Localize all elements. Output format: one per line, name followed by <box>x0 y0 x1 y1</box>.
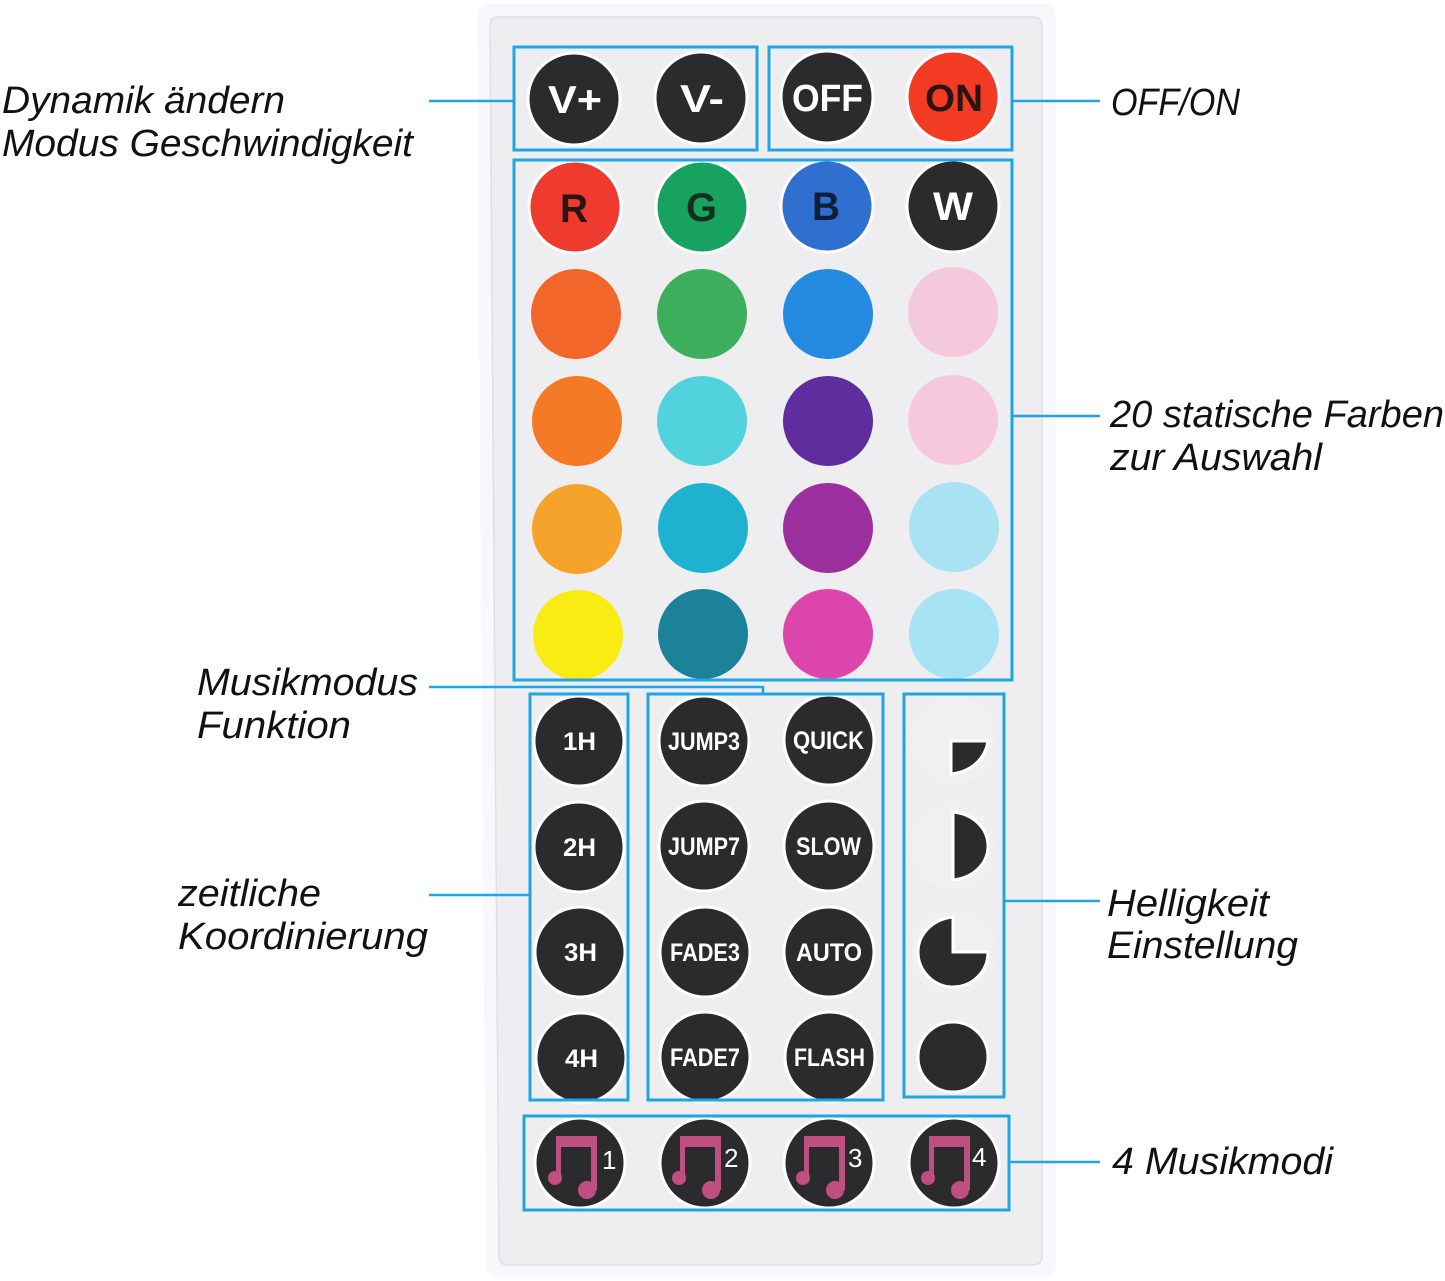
button: music 3 <box>784 1118 874 1208</box>
connector: music modes <box>1009 1161 1100 1163</box>
button: FADE3 <box>660 907 750 997</box>
label: timer: Koordinierung <box>178 916 428 958</box>
button: G <box>656 161 748 253</box>
button: music 1: 1 <box>602 1145 616 1175</box>
button: QUICK <box>784 695 874 785</box>
button: music 4 <box>909 1118 999 1208</box>
button: AUTO <box>784 907 874 997</box>
button: OFF <box>781 51 873 143</box>
brightness buttons <box>909 696 997 1092</box>
button: FADE3: FADE3 <box>670 939 740 967</box>
button: ON <box>907 51 999 143</box>
button: 3H <box>535 907 625 997</box>
button: JUMP3: JUMP3 <box>668 728 740 756</box>
button: 2H: 2H <box>563 834 596 862</box>
button: music 4: 4 <box>972 1142 986 1172</box>
connector: speed <box>429 100 514 102</box>
label: colours <box>1109 394 1444 479</box>
button: music 2: 2 <box>724 1143 738 1173</box>
remote control body <box>477 4 1056 1277</box>
button: V- <box>655 52 747 144</box>
button: 2H <box>534 802 624 892</box>
connector: music function <box>429 687 763 694</box>
button: FLASH: FLASH <box>794 1044 865 1072</box>
button: B: B <box>812 185 840 229</box>
label: speed <box>2 80 414 165</box>
label: music modes: 4 Musikmodi <box>1112 1141 1335 1183</box>
button: 3H: 3H <box>564 939 597 967</box>
button: JUMP7 <box>659 801 749 891</box>
label: timer: zeitliche <box>177 873 321 915</box>
button: FADE7: FADE7 <box>670 1044 740 1072</box>
highlight box: off on <box>769 47 1012 150</box>
button: music 3: 3 <box>848 1143 862 1173</box>
button: 4H <box>536 1013 626 1103</box>
button: FADE7 <box>660 1012 750 1102</box>
button: W <box>907 160 999 252</box>
highlight box: music function <box>648 694 883 1100</box>
label: brightness: Einstellung <box>1107 925 1298 967</box>
label: brightness: Helligkeit <box>1107 883 1271 925</box>
button: 1H: 1H <box>563 728 596 756</box>
button: R <box>529 161 621 253</box>
colour buttons grid <box>531 267 999 680</box>
label: music function <box>197 662 418 747</box>
button: JUMP3 <box>659 696 749 786</box>
button: W: W <box>933 185 973 229</box>
highlight box: speed <box>514 47 757 150</box>
button: music 2 <box>660 1118 750 1208</box>
highlight box: music modes <box>524 1116 1009 1210</box>
label: speed: Dynamik ändern <box>2 80 285 122</box>
highlight box: brightness <box>904 694 1004 1097</box>
button: V+: V+ <box>548 79 602 122</box>
label: colours: zur Auswahl <box>1109 437 1324 479</box>
button: SLOW: SLOW <box>796 833 861 861</box>
button: JUMP7: JUMP7 <box>668 833 740 861</box>
connector: colours <box>1012 415 1100 417</box>
button: OFF: OFF <box>792 78 863 120</box>
label: music function: Funktion <box>197 705 351 747</box>
connector: timer <box>429 894 530 896</box>
button: 4H: 4H <box>565 1045 598 1073</box>
button: B <box>781 160 873 252</box>
label: timer <box>177 873 428 958</box>
connector: brightness <box>1004 900 1100 902</box>
button: R: R <box>560 187 588 231</box>
highlight box: colours <box>514 160 1012 680</box>
button: G: G <box>686 186 717 230</box>
label: speed: Modus Geschwindigkeit <box>2 123 414 165</box>
connector: off on <box>1012 100 1100 102</box>
button: music 1 <box>535 1118 625 1208</box>
highlight box: timer <box>530 694 628 1100</box>
button: ON: ON <box>925 78 983 120</box>
button: FLASH <box>785 1012 875 1102</box>
button: AUTO: AUTO <box>796 939 862 967</box>
label: off on: OFF/ON <box>1111 82 1240 124</box>
button: V-: V- <box>680 78 724 121</box>
button: QUICK: QUICK <box>793 727 864 755</box>
label: colours: 20 statische Farben <box>1109 394 1444 436</box>
label: brightness <box>1107 883 1298 967</box>
button: SLOW <box>784 801 874 891</box>
button: V+ <box>528 53 620 145</box>
label: music function: Musikmodus <box>197 662 418 704</box>
button: 1H <box>534 696 624 786</box>
